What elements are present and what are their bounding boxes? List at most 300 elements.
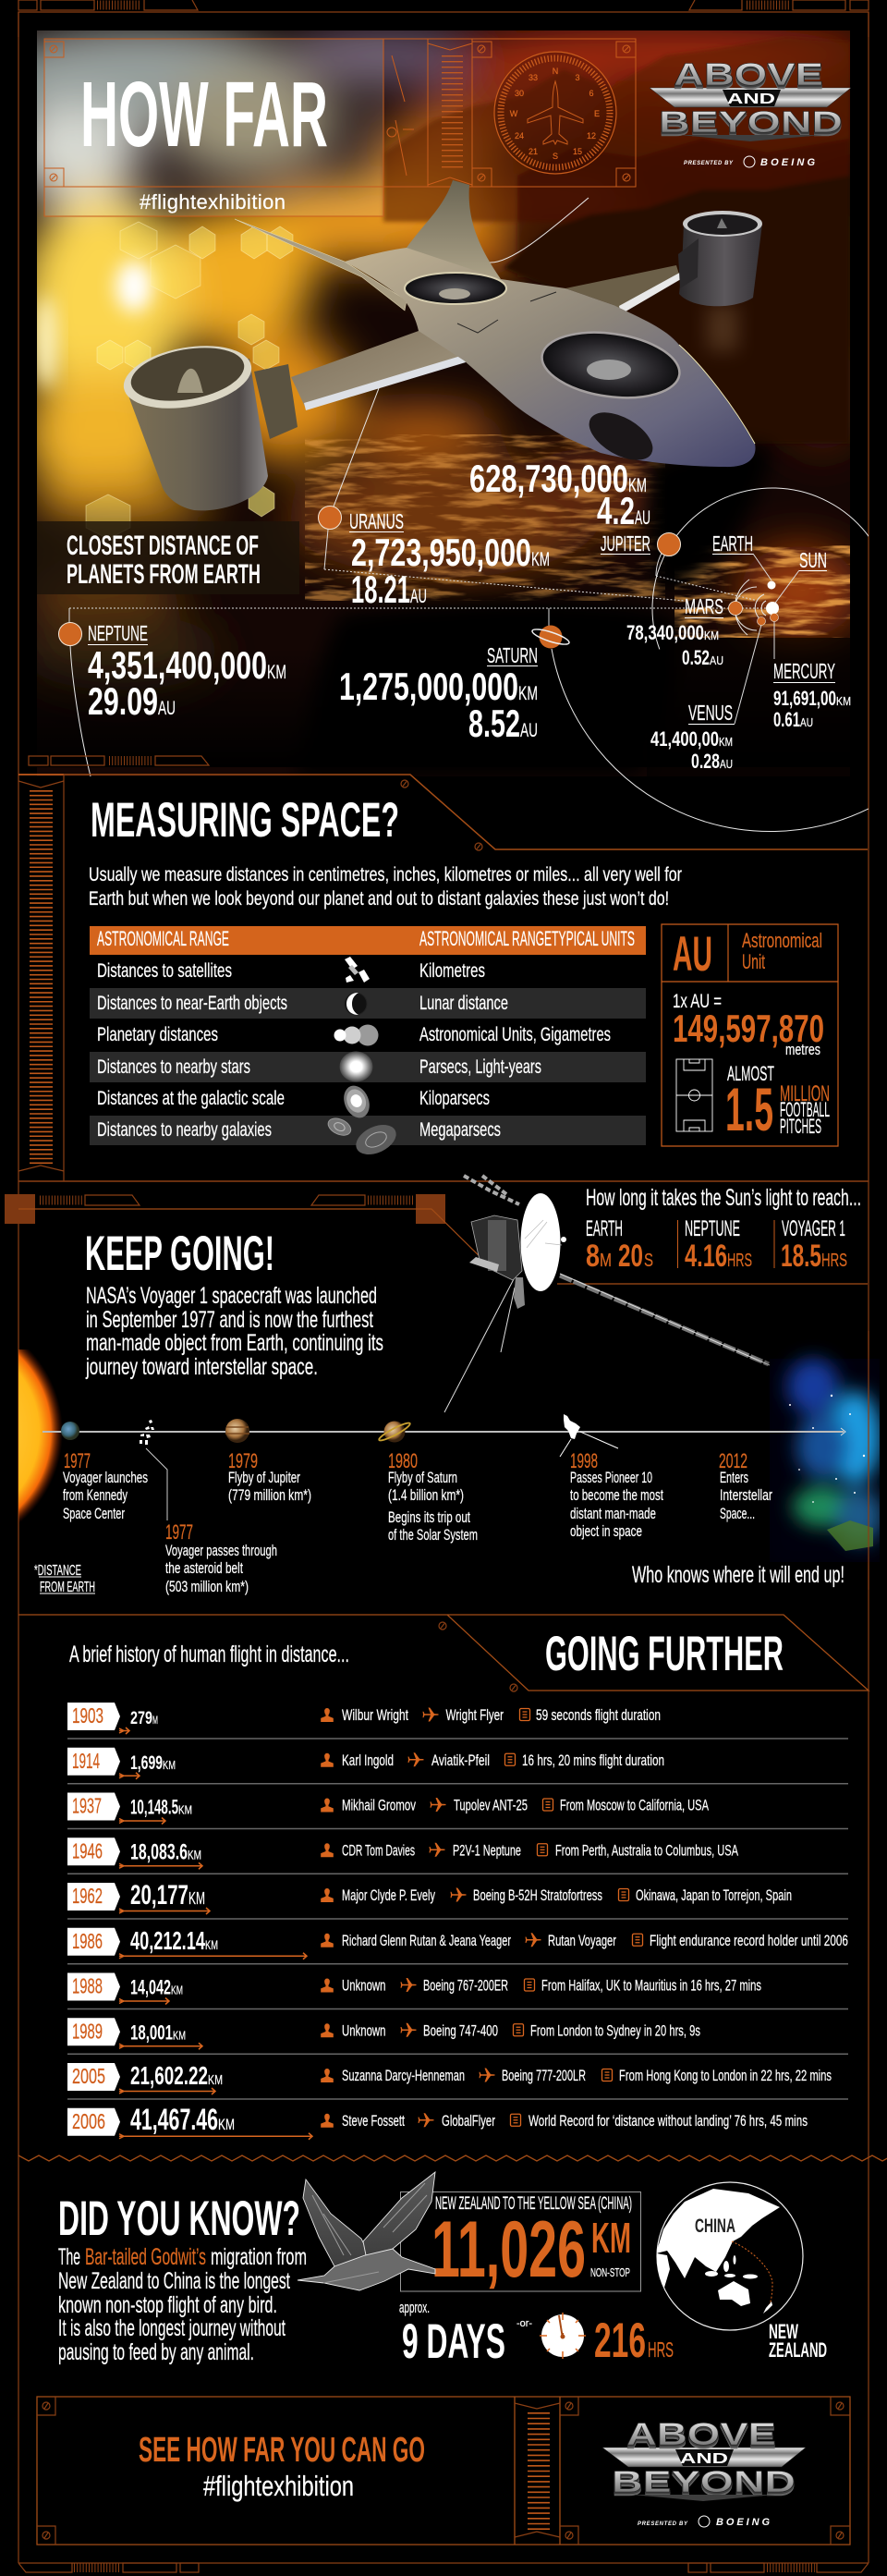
pilot, aircraft and details: [321, 1706, 661, 1724]
label: Jupiter: 628,730,000: [469, 457, 628, 500]
event: 1980 Saturn: Flyby of Saturn: [388, 1469, 457, 1486]
year tag: 1946: [72, 1838, 103, 1862]
paragraph: Bar-tailed Godwit: Bar-tailed Godwit’s: [85, 2244, 206, 2270]
event: 2012 interstellar: Space...: [720, 1505, 755, 1522]
year tag: 1986: [72, 1929, 103, 1953]
event: 1977 asteroid belt: the asteroid belt: [165, 1559, 243, 1577]
paragraph: Bar-tailed Godwit: It is also the longest journey without: [58, 2315, 286, 2341]
label: Saturn: KM: [518, 683, 538, 704]
icon: galaxy: [339, 1081, 374, 1122]
icon: planets: [334, 1024, 379, 1046]
planet: Mercury: [771, 614, 778, 621]
year tag: 2005: [72, 2064, 105, 2088]
label: Jupiter: JUPITER: [601, 531, 650, 555]
distance: KM: [173, 2028, 186, 2042]
icon: Earth: [61, 1422, 79, 1440]
label: Venus: AU: [720, 757, 733, 771]
event: 1998 Pioneer: 1998: [570, 1449, 598, 1472]
label: Earth: [712, 531, 753, 555]
pilot, aircraft and details: Unknown: [342, 2021, 386, 2039]
compass: W: [510, 109, 518, 118]
label: Venus: 0.28: [691, 750, 720, 773]
orbit diagram: [58, 488, 869, 832]
icon: moon: [345, 993, 367, 1015]
year tag: 1937: [72, 1793, 102, 1817]
event: 1979 Jupiter: (779 million km*): [228, 1486, 311, 1504]
pilot, aircraft and details: Karl Ingold: [342, 1752, 394, 1769]
panel: distance flown: NON-STOP: [590, 2265, 630, 2279]
label: Neptune: NEPTUNE: [88, 621, 148, 645]
hashtag: #flightexhibition: [203, 2470, 354, 2502]
map: globe migration route: ZEALAND: [769, 2338, 827, 2362]
paragraph: Bar-tailed Godwit: [58, 2244, 307, 2365]
orbit arcs: [70, 488, 869, 832]
year tag: 1914: [72, 1749, 100, 1773]
table rows text: Parsecs, Light-years: [419, 1056, 541, 1078]
panel: astronomical unit: [662, 924, 838, 1146]
year tag: 1989: [72, 2019, 103, 2043]
label: Neptune: [88, 621, 286, 723]
label: Sun: [799, 548, 827, 572]
year tag: 1988: [72, 1974, 103, 1998]
paragraph: Voyager 1: [85, 1283, 383, 1380]
panel: distance flown: [401, 2192, 641, 2294]
logo: Above and Beyond: BOEING: [716, 2517, 770, 2528]
label: Mars: [626, 594, 723, 669]
label: Uranus: 2,723,950,000: [351, 531, 531, 574]
panel: astronomical unit: Unit: [742, 950, 765, 973]
event: 1980 Saturn: of the Solar System: [388, 1526, 478, 1544]
canopy: [581, 403, 661, 470]
panel: distance flown: NEW ZEALAND TO THE YELLOW SEA (CHINA): [435, 2194, 632, 2214]
panel: Sun's light travel times: NEPTUNE: [685, 1216, 740, 1241]
label: Neptune: KM: [267, 662, 286, 683]
event: 2012 interstellar: 2012: [719, 1449, 747, 1472]
logo: Above and Beyond: AND: [727, 92, 775, 107]
distance: 10,148.5: [130, 1795, 178, 1819]
pilot, aircraft and details: [321, 1976, 761, 1995]
call to action heading: SEE HOW FAR YOU CAN GO: [139, 2431, 425, 2470]
distance arrow: [119, 1728, 129, 1734]
section frame: keep going: [5, 1181, 869, 1284]
callout: closest distance heading: CLOSEST DISTANCE OF: [67, 531, 259, 561]
label: Jupiter: 4.2: [597, 489, 635, 532]
distance: KM: [178, 1802, 192, 1817]
planet: Venus: [758, 617, 765, 625]
pilot, aircraft and details: [321, 1752, 664, 1769]
table header: ASTRONOMICAL RANGE: [97, 927, 229, 950]
event: 1998 Pioneer: to become the most: [570, 1486, 663, 1504]
planet: Neptune: [59, 623, 81, 645]
intro paragraph: [89, 864, 682, 910]
table header: ASTRONOMICAL RANGETYPICAL UNITS: [419, 927, 635, 950]
label: Mercury: MERCURY: [773, 659, 835, 683]
big fan: [538, 324, 684, 406]
pilot, aircraft and details: [321, 1886, 792, 1904]
pilot, aircraft and details: 16 hrs, 20 mins flight duration: [522, 1752, 664, 1769]
section frame: going further: [18, 1615, 869, 1691]
panel: astronomical unit: 1.5: [725, 1075, 773, 1143]
panel: call to action footer: [37, 2397, 850, 2545]
pilot, aircraft and details: [321, 1932, 848, 1949]
panel: distance flown: 11,026: [431, 2205, 586, 2294]
pilot, aircraft and details: Tupolev ANT-25: [454, 1797, 528, 1813]
icon: Jupiter: [225, 1419, 249, 1443]
distance: 41,467.46: [130, 2103, 218, 2136]
logo: Above and Beyond: AND: [680, 2451, 728, 2467]
label: Mercury: 0.61: [773, 708, 800, 731]
planet: Earth: [767, 580, 776, 590]
compass: N: [553, 67, 558, 76]
panel: astronomical unit: PITCHES: [780, 1115, 821, 1138]
distance arrow: [119, 2043, 202, 2049]
event: 1998 Pioneer: object in space: [570, 1522, 642, 1540]
label: Uranus: URANUS: [349, 509, 404, 533]
right engine thrust: [707, 305, 738, 351]
duration stats: HRS: [648, 2338, 674, 2362]
illustration: godwit bird: [298, 2172, 435, 2290]
compass: 3: [575, 73, 580, 82]
label: Saturn: [339, 643, 538, 745]
pilot, aircraft and details: Boeing 747-400: [423, 2021, 498, 2039]
label: Mars: AU: [710, 653, 723, 667]
panel: Sun's light travel times: S: [644, 1251, 653, 1271]
panel: astronomical unit: metres: [785, 1041, 820, 1058]
distance: M: [152, 1714, 158, 1727]
icon: satellite: [345, 957, 370, 983]
pilot, aircraft and details: CDR Tom Davies: [342, 1841, 415, 1859]
paragraph: Voyager 1: in September 1977 and is now the furthest: [86, 1307, 373, 1333]
icon: Pioneer 10: [560, 1414, 618, 1457]
distance arrow: [119, 2088, 215, 2094]
panel: Sun's light travel times: 8: [586, 1239, 600, 1274]
event: 1998 Pioneer: Passes Pioneer 10: [570, 1469, 652, 1486]
logo: Above and Beyond: PRESENTED BY: [684, 161, 734, 166]
logo: Above and Beyond: BOEING: [760, 157, 815, 168]
panel: astronomical unit: Astronomical: [742, 929, 822, 952]
label: Saturn: AU: [520, 720, 538, 741]
label: Neptune: 4,351,400,000: [88, 643, 267, 687]
label: Earth: EARTH: [712, 531, 753, 555]
icon: clock: [540, 2313, 586, 2359]
panel: Sun's light travel times: 4.16: [685, 1239, 727, 1274]
event: 2012 interstellar: [719, 1449, 772, 1522]
label: Venus: [650, 701, 735, 773]
heading: Measuring Space: MEASURING SPACE?: [91, 793, 399, 848]
aircraft illustration: [119, 180, 762, 510]
distance arrow: [119, 1908, 210, 1914]
callout: closest distance heading: [37, 521, 299, 594]
pilot, aircraft and details: Steve Fossett: [342, 2112, 405, 2130]
planet: Saturn: [530, 625, 571, 649]
decorative bottom frame: [18, 2563, 869, 2572]
title: How Far: HOW FAR: [80, 63, 328, 166]
pilot, aircraft and details: [321, 2112, 808, 2130]
distance: KM: [188, 1847, 201, 1862]
tail fin: [407, 180, 501, 279]
illustration: Voyager spacecraft: [444, 1176, 770, 1412]
table rows text: Distances to nearby galaxies: [97, 1119, 272, 1141]
distance: KM: [205, 1937, 218, 1952]
compass: 30: [515, 89, 524, 98]
label: Saturn: SATURN: [487, 643, 538, 667]
label: Neptune: AU: [158, 698, 176, 719]
pilot, aircraft and details: GlobalFlyer: [442, 2112, 495, 2130]
pilot, aircraft and details: Major Clyde P. Evely: [342, 1886, 435, 1904]
connector lines: [69, 530, 799, 724]
footnote: distance from Earth: FROM EARTH: [40, 1580, 95, 1595]
planet: Mars: [728, 601, 743, 616]
pilot, aircraft and details: Wilbur Wright: [342, 1706, 408, 1724]
flight record 1937: [67, 1793, 848, 1828]
flight record 2006: [67, 2103, 808, 2140]
icon: football pitch: [676, 1059, 712, 1131]
panel: Sun's light travel times: 18.5: [781, 1239, 821, 1274]
distance arrow: [119, 1998, 169, 2004]
panel: Sun's light travel times: HRS: [821, 1251, 847, 1271]
label: Mercury: AU: [800, 715, 813, 729]
pilot, aircraft and details: Mikhail Gromov: [342, 1797, 416, 1813]
event: 1979 Jupiter: Flyby of Jupiter: [228, 1469, 300, 1486]
pilot, aircraft and details: Boeing B-52H Stratofortress: [473, 1886, 602, 1904]
flight record 2005: [67, 2061, 848, 2099]
pilot, aircraft and details: [321, 2021, 700, 2039]
paragraph: Bar-tailed Godwit: New Zealand to China is the longest: [58, 2268, 290, 2294]
panel: Sun's light travel times: [586, 1185, 861, 1274]
pilot, aircraft and details: [321, 1797, 709, 1813]
logo: Above and Beyond: [650, 57, 851, 168]
event: 1980 Saturn: (1.4 billion km*): [388, 1486, 464, 1504]
dark chasm: [648, 446, 772, 592]
distance arrow: [119, 1817, 165, 1825]
distance: 18,083.6: [130, 1839, 188, 1864]
paragraph: Bar-tailed Godwit: known non-stop flight of any bird.: [58, 2292, 277, 2318]
table rows text: [97, 960, 611, 1141]
label: Uranus: KM: [531, 549, 550, 570]
flight record 1903: [67, 1703, 848, 1739]
label: Jupiter: KM: [628, 475, 647, 496]
distance arrow: [119, 1862, 202, 1869]
panel: Sun's light travel times: EARTH: [586, 1216, 623, 1241]
distance: KM: [188, 1889, 205, 1908]
table rows text: Kiloparsecs: [419, 1088, 490, 1109]
footnote: distance from Earth: *DISTANCE: [34, 1563, 81, 1579]
event: 2012 interstellar: Enters: [720, 1469, 748, 1486]
duration stats: approx.: [399, 2299, 430, 2316]
intro paragraph: Usually we measure distances in centimetres, inches, kilometres or miles... all very well for: [89, 864, 682, 885]
canyon texture: [305, 434, 850, 638]
event: 2012 interstellar: Interstellar: [720, 1486, 772, 1504]
label: Uranus: [349, 509, 550, 611]
label: Uranus: 18.21: [351, 568, 410, 611]
table rows text: Distances to nearby stars: [97, 1056, 250, 1078]
flight record 1989: [67, 2018, 848, 2054]
paragraph: Voyager 1: NASA’s Voyager 1 spacecraft was launched: [86, 1283, 377, 1309]
paragraph: Bar-tailed Godwit: pausing to feed by any animal.: [58, 2339, 254, 2365]
distance: KM: [163, 1758, 176, 1772]
label: Sun: SUN: [799, 548, 827, 572]
label: Mars: MARS: [685, 594, 723, 618]
pilot, aircraft and details: Boeing 777-200LR: [502, 2067, 586, 2084]
label: Saturn: 1,275,000,000: [339, 665, 518, 708]
logo: Above and Beyond: [602, 2417, 806, 2528]
distance: 21,602.22: [130, 2061, 208, 2090]
panel: distance flown: KM: [591, 2214, 631, 2262]
event: 1977 launch: 1977: [64, 1449, 91, 1472]
table rows text: Distances at the galactic scale: [97, 1088, 285, 1109]
distance arrow: [119, 1773, 140, 1779]
compass: 12: [587, 131, 596, 140]
table rows text: Kilometres: [419, 960, 485, 982]
year tag: 1903: [72, 1703, 103, 1728]
pilot, aircraft and details: From London to Sydney in 20 hrs, 9s: [530, 2021, 700, 2039]
distance: KM: [208, 2072, 223, 2088]
mountain ridges: [383, 37, 850, 444]
logo: Above and Beyond: BEYOND: [612, 2465, 796, 2498]
flight record 1914: [67, 1748, 848, 1784]
pilot, aircraft and details: From Halifax, UK to Mauritius in 16 hrs, 27 mins: [541, 1976, 761, 1995]
label: Mercury: KM: [836, 694, 851, 708]
event: 1980 Saturn: Begins its trip out: [388, 1508, 470, 1526]
event: 1977 asteroid belt: (503 million km*): [165, 1578, 249, 1595]
section frame: measuring space: [18, 756, 868, 1181]
panel: astronomical unit: MILLION: [780, 1081, 830, 1106]
distance: 18,001: [130, 2021, 173, 2044]
icon: galaxies: [325, 1115, 401, 1160]
planet: Jupiter: [658, 532, 680, 556]
event: 1979 Jupiter: 1979: [228, 1449, 258, 1472]
panel: astronomical unit: AU: [673, 927, 712, 982]
panel: astronomical unit: ALMOST: [727, 1062, 774, 1085]
pilot, aircraft and details: [321, 2067, 832, 2084]
panel: astronomical unit: FOOTBALL: [780, 1098, 830, 1121]
distance: 1,699: [130, 1752, 163, 1774]
panel: astronomical unit: 149,597,870: [673, 1007, 824, 1050]
connector: asteroid label: [146, 1448, 167, 1520]
pilot, aircraft and details: From Moscow to California, USA: [560, 1797, 709, 1813]
distance: 279: [130, 1709, 152, 1728]
map: globe migration route: CHINA: [695, 2216, 735, 2237]
pilot, aircraft and details: Unknown: [342, 1976, 386, 1995]
paragraph: Voyager 1: man-made object from Earth, continuing its: [86, 1330, 383, 1356]
label: Jupiter: AU: [635, 507, 650, 529]
event: 1977 launch: from Kennedy: [63, 1486, 128, 1504]
event: 1977 launch: [63, 1449, 148, 1522]
timeline: [43, 1414, 845, 1595]
sun: [766, 602, 779, 615]
hexagon overlays: [86, 222, 293, 539]
map: globe migration route: NEW: [769, 2320, 798, 2343]
left engine: [119, 336, 298, 510]
event: 1980 Saturn: 1980: [388, 1449, 418, 1472]
logo: Above and Beyond: BEYOND: [659, 105, 843, 139]
event: 1977 launch: Space Center: [63, 1505, 125, 1522]
distance: KM: [218, 2116, 235, 2133]
distance: 14,042: [130, 1976, 171, 1998]
table rows text: Lunar distance: [419, 993, 508, 1014]
text: brief history: A brief history of human flight in distance...: [69, 1642, 349, 1667]
map: globe migration route: [656, 2182, 827, 2362]
intro paragraph: Earth but when we look beyond our planet and out to distant galaxies these just won’t do!: [89, 888, 669, 910]
image: nebula: [770, 1359, 882, 1562]
distance arrow: [119, 1953, 307, 1959]
table rows text: Planetary distances: [97, 1024, 218, 1045]
left spike wing: [235, 219, 407, 311]
compass: 24: [515, 131, 524, 140]
top fan: [405, 273, 506, 304]
flight record 1946: [67, 1837, 848, 1874]
distance arrow: [119, 2133, 312, 2140]
label: Venus: 41,400,00: [650, 727, 719, 751]
table: astronomical ranges: [90, 926, 646, 1160]
label: Uranus: AU: [410, 586, 427, 607]
fuselage: [345, 248, 756, 467]
label: Mars: 0.52: [682, 646, 710, 669]
paragraph: Voyager 1: journey toward interstellar space.: [85, 1354, 318, 1380]
distance: 40,212.14: [130, 1926, 205, 1955]
compass: 21: [529, 147, 538, 156]
table rows text: Megaparsecs: [419, 1119, 501, 1141]
flight record 1988: [67, 1972, 848, 2009]
panel: Sun's light travel times: 20: [618, 1239, 643, 1274]
compass: S: [553, 152, 558, 161]
compass: 15: [573, 147, 582, 156]
event: 1977 asteroid belt: 1977: [165, 1520, 193, 1544]
logo: Above and Beyond: PRESENTED BY: [638, 2521, 688, 2527]
label: Mars: KM: [704, 629, 719, 642]
icon: asteroid belt: [140, 1420, 154, 1445]
label: Neptune: 29.09: [88, 679, 158, 723]
heading: Did You Know: DID YOU KNOW?: [58, 2191, 300, 2246]
right engine: [678, 211, 762, 306]
event: 1977 launch: Voyager launches: [63, 1469, 148, 1486]
pilot, aircraft and details: Suzanna Darcy-Henneman: [342, 2067, 465, 2084]
label: Jupiter: [469, 457, 650, 555]
compass: E: [594, 109, 600, 118]
pilot, aircraft and details: Okinawa, Japan to Torrejon, Spain: [636, 1886, 792, 1904]
panel: Sun's light travel times: HRS: [727, 1251, 752, 1271]
distance: KM: [171, 1984, 183, 1996]
table header: [90, 926, 646, 955]
pilot, aircraft and details: Wright Flyer: [445, 1706, 504, 1724]
pilot, aircraft and details: Aviatik-Pfeil: [431, 1752, 490, 1769]
panel: astronomical unit: 1x AU =: [673, 991, 722, 1012]
label: Mercury: [773, 659, 851, 731]
duration stats: [399, 2299, 674, 2369]
footnote: distance from Earth: [34, 1563, 95, 1595]
table rows text: Distances to satellites: [97, 960, 232, 982]
heading: Keep Going: KEEP GOING!: [85, 1227, 274, 1281]
pilot, aircraft and details: Richard Glenn Rutan & Jeana Yeager: [342, 1932, 511, 1949]
distance: 20,177: [130, 1880, 188, 1911]
table rows text: Distances to near-Earth objects: [97, 993, 287, 1014]
label: Mars: 78,340,000: [626, 621, 704, 644]
label: Saturn: 8.52: [468, 702, 520, 745]
event: 1979 Jupiter: [228, 1449, 311, 1504]
planet: Uranus: [318, 507, 342, 529]
left wing: [291, 331, 464, 407]
icon: Saturn: [378, 1421, 411, 1443]
instrument panel overlay: [44, 39, 636, 216]
pilot, aircraft and details: From Perth, Australia to Columbus, USA: [555, 1841, 738, 1859]
pilot, aircraft and details: Rutan Voyager: [548, 1932, 616, 1949]
logo: Above and Beyond: ABOVE: [674, 57, 823, 92]
hero image background: [0, 26, 887, 776]
year tag: 2006: [72, 2109, 105, 2133]
pilot, aircraft and details: Boeing 767-200ER: [423, 1976, 508, 1995]
event: 1977 asteroid belt: Voyager passes through: [165, 1542, 277, 1559]
flight record 1986: [67, 1926, 848, 1964]
